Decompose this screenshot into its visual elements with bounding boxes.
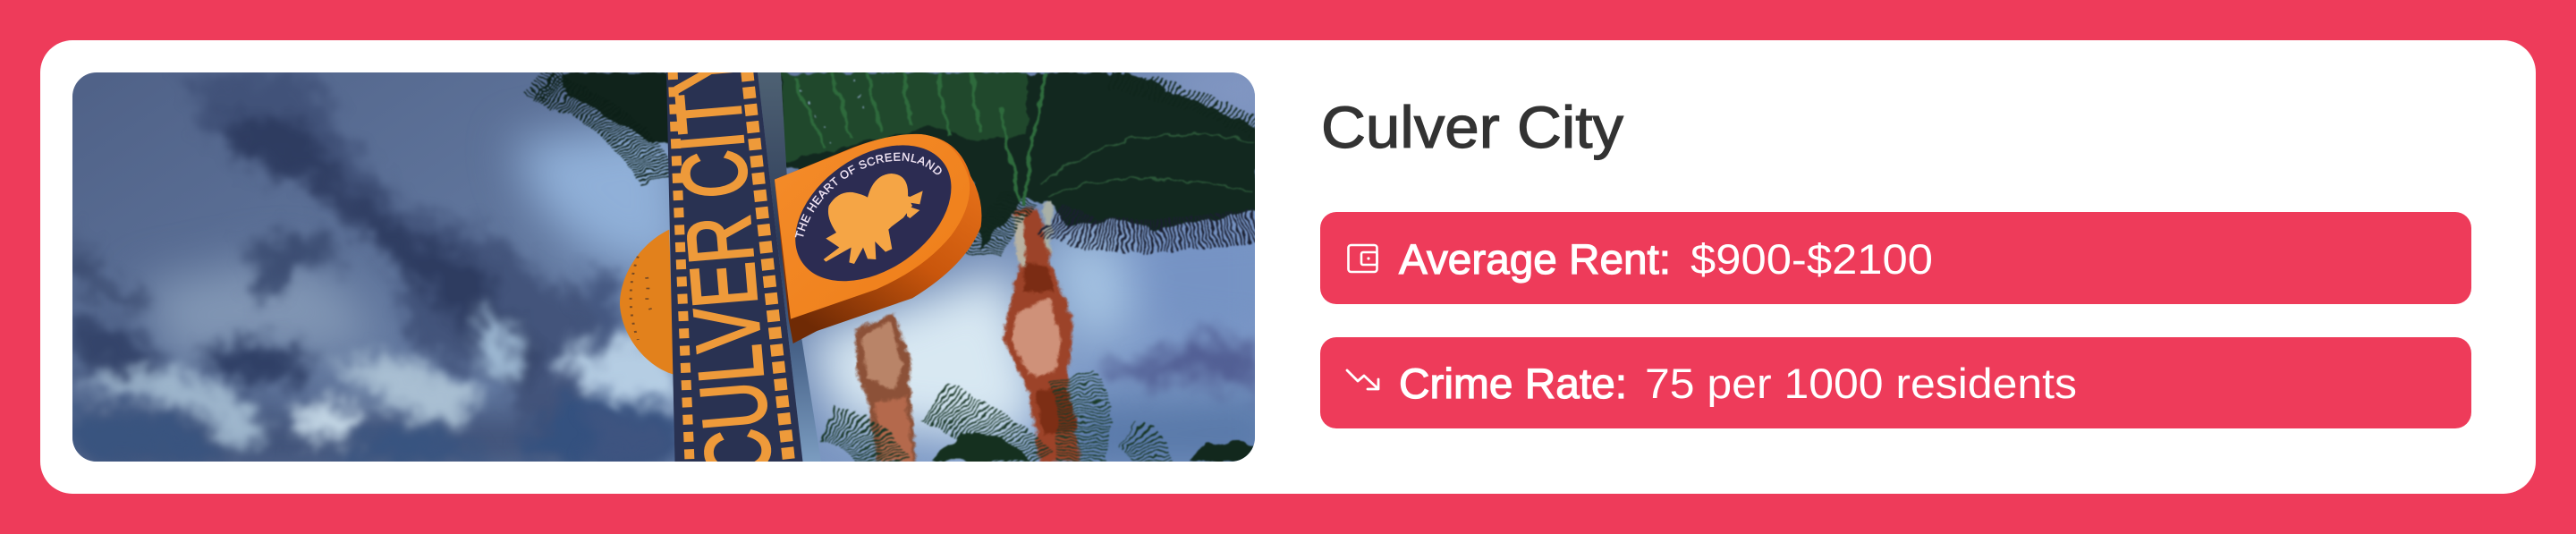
palm trunks	[856, 194, 1081, 462]
dark medallion	[795, 145, 952, 281]
medallion curved text	[802, 161, 944, 239]
stat bar: average rent	[1320, 212, 2471, 304]
sky clouds, right side	[590, 262, 1258, 462]
photo: Culver City film strip sign and palm trees	[72, 72, 1255, 462]
value: rent range: $900-$2100	[1690, 235, 1933, 283]
round sign: the heart of screenland: THE HEART OF SCREENLAND	[794, 152, 942, 238]
sky tones, soft	[72, 63, 1284, 471]
sign post steel side	[758, 72, 821, 462]
icon: wallet	[1349, 245, 1377, 272]
sign back half	[620, 230, 674, 375]
value: crime per 1000 residents: 75 per 1000 residents	[1645, 360, 2077, 407]
heading: Culver City: Culver City	[1321, 94, 1623, 160]
label: crime rate: Crime Rate:	[1399, 360, 1627, 407]
icon: downward trend arrow	[1347, 370, 1378, 389]
film strip pole	[666, 72, 803, 462]
stat bar: crime rate	[1320, 337, 2471, 428]
sign rim	[775, 134, 981, 343]
label: average rent: Average Rent:	[1399, 235, 1671, 283]
round sign: the heart of screenland	[775, 134, 982, 343]
movie camera silhouette	[824, 174, 923, 264]
palm tree fronds, upper left	[534, 72, 677, 179]
sign face	[775, 134, 970, 319]
sky clouds, left side	[72, 72, 676, 462]
palm tree fronds, bottom	[826, 376, 1256, 465]
film perforations	[673, 70, 789, 462]
palm tree crown, right	[779, 72, 1258, 257]
